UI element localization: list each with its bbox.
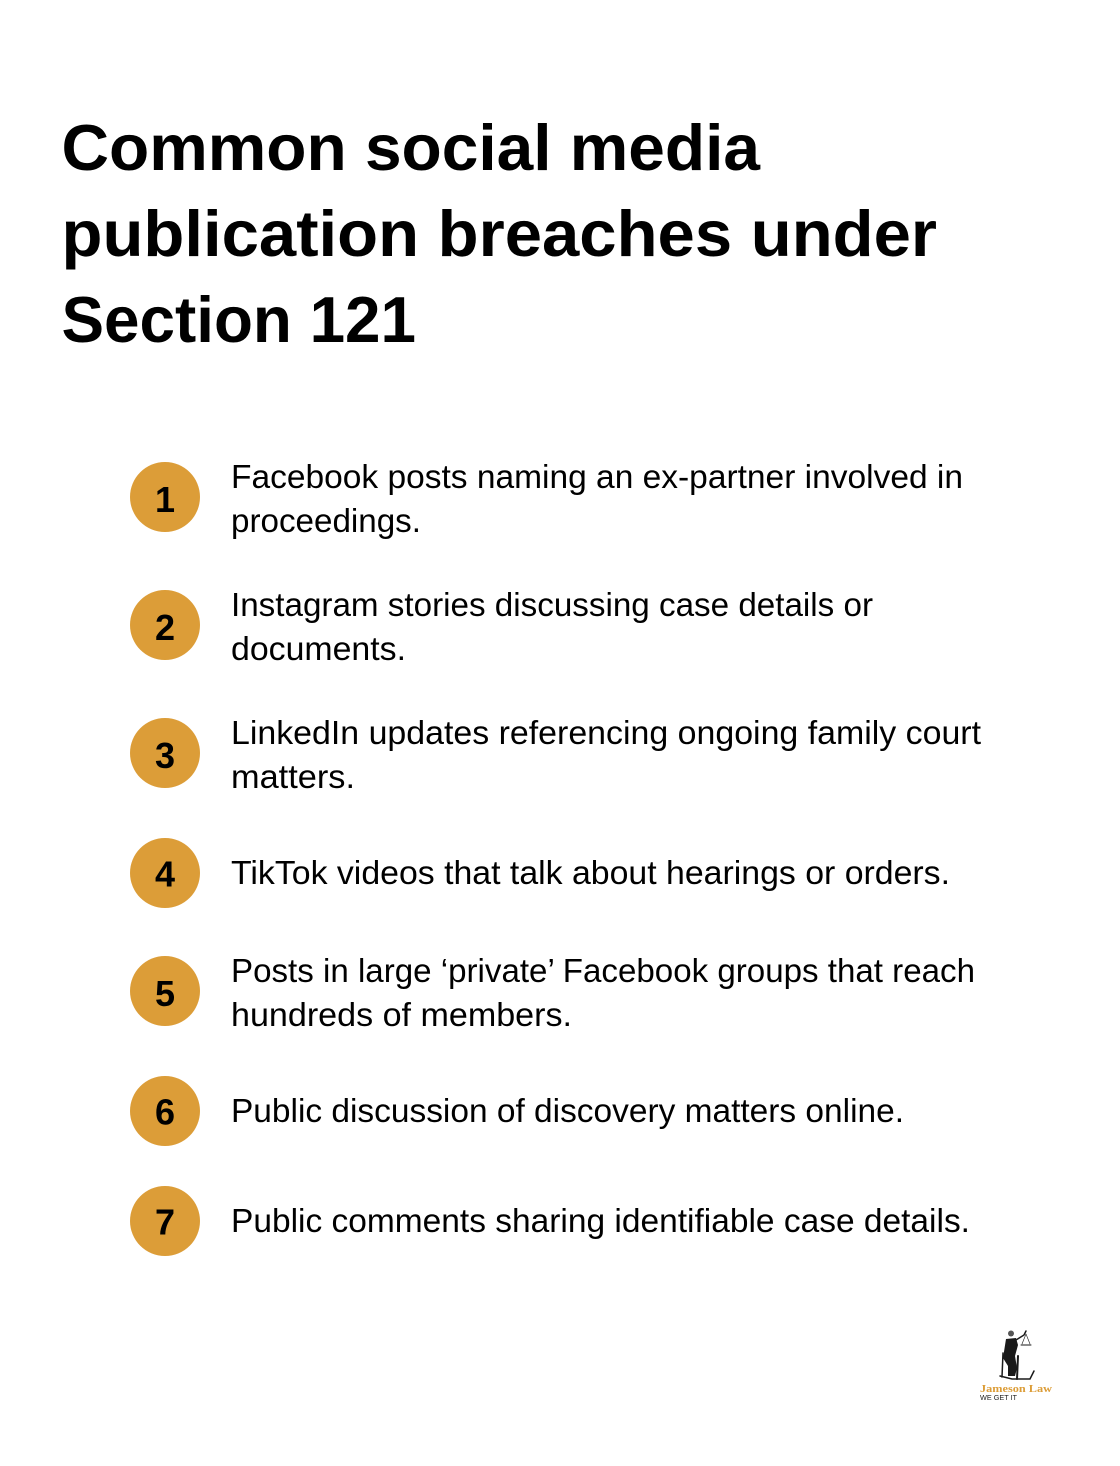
list of breaches <box>130 458 981 1256</box>
item 7: 7 <box>155 1202 175 1242</box>
item 1 <box>130 458 963 539</box>
item 4: TikTok videos that talk about hearings or orders. <box>231 854 950 891</box>
item 5: 5 <box>155 973 175 1014</box>
item 4 <box>130 838 950 908</box>
item 1: Facebook posts naming an ex-partner involved in <box>231 458 963 495</box>
item 5: hundreds of members. <box>231 996 572 1033</box>
item 1: 1 <box>155 479 175 520</box>
logo name: Jameson Law <box>980 1384 1052 1395</box>
title: publication breaches under <box>62 197 937 270</box>
item 4: 4 <box>155 854 175 894</box>
title: Section 121 <box>62 283 416 356</box>
item 2: documents. <box>231 630 406 667</box>
item 2 <box>130 586 873 667</box>
item 6 <box>130 1076 904 1146</box>
item 6: Public discussion of discovery matters online. <box>231 1092 904 1129</box>
item 3 <box>130 714 981 795</box>
item 1: proceedings. <box>231 502 421 539</box>
logo tagline: WE GET IT <box>980 1395 1018 1402</box>
item 5: Posts in large ‘private’ Facebook groups that reach <box>231 952 975 989</box>
item 6: 6 <box>155 1092 175 1132</box>
item 3: matters. <box>231 758 355 795</box>
item 2: 2 <box>155 607 175 648</box>
item 2: Instagram stories discussing case details or <box>231 586 873 623</box>
item 3: LinkedIn updates referencing ongoing family court <box>231 714 981 751</box>
item 3: 3 <box>155 735 175 776</box>
item 5 <box>130 952 975 1033</box>
logo: Jameson Law <box>980 1330 1052 1402</box>
title <box>62 111 937 356</box>
item 7 <box>130 1186 970 1256</box>
title: Common social media <box>62 111 761 184</box>
item 7: Public comments sharing identifiable case details. <box>231 1202 970 1239</box>
icon: lady justice with scales <box>1000 1330 1034 1379</box>
